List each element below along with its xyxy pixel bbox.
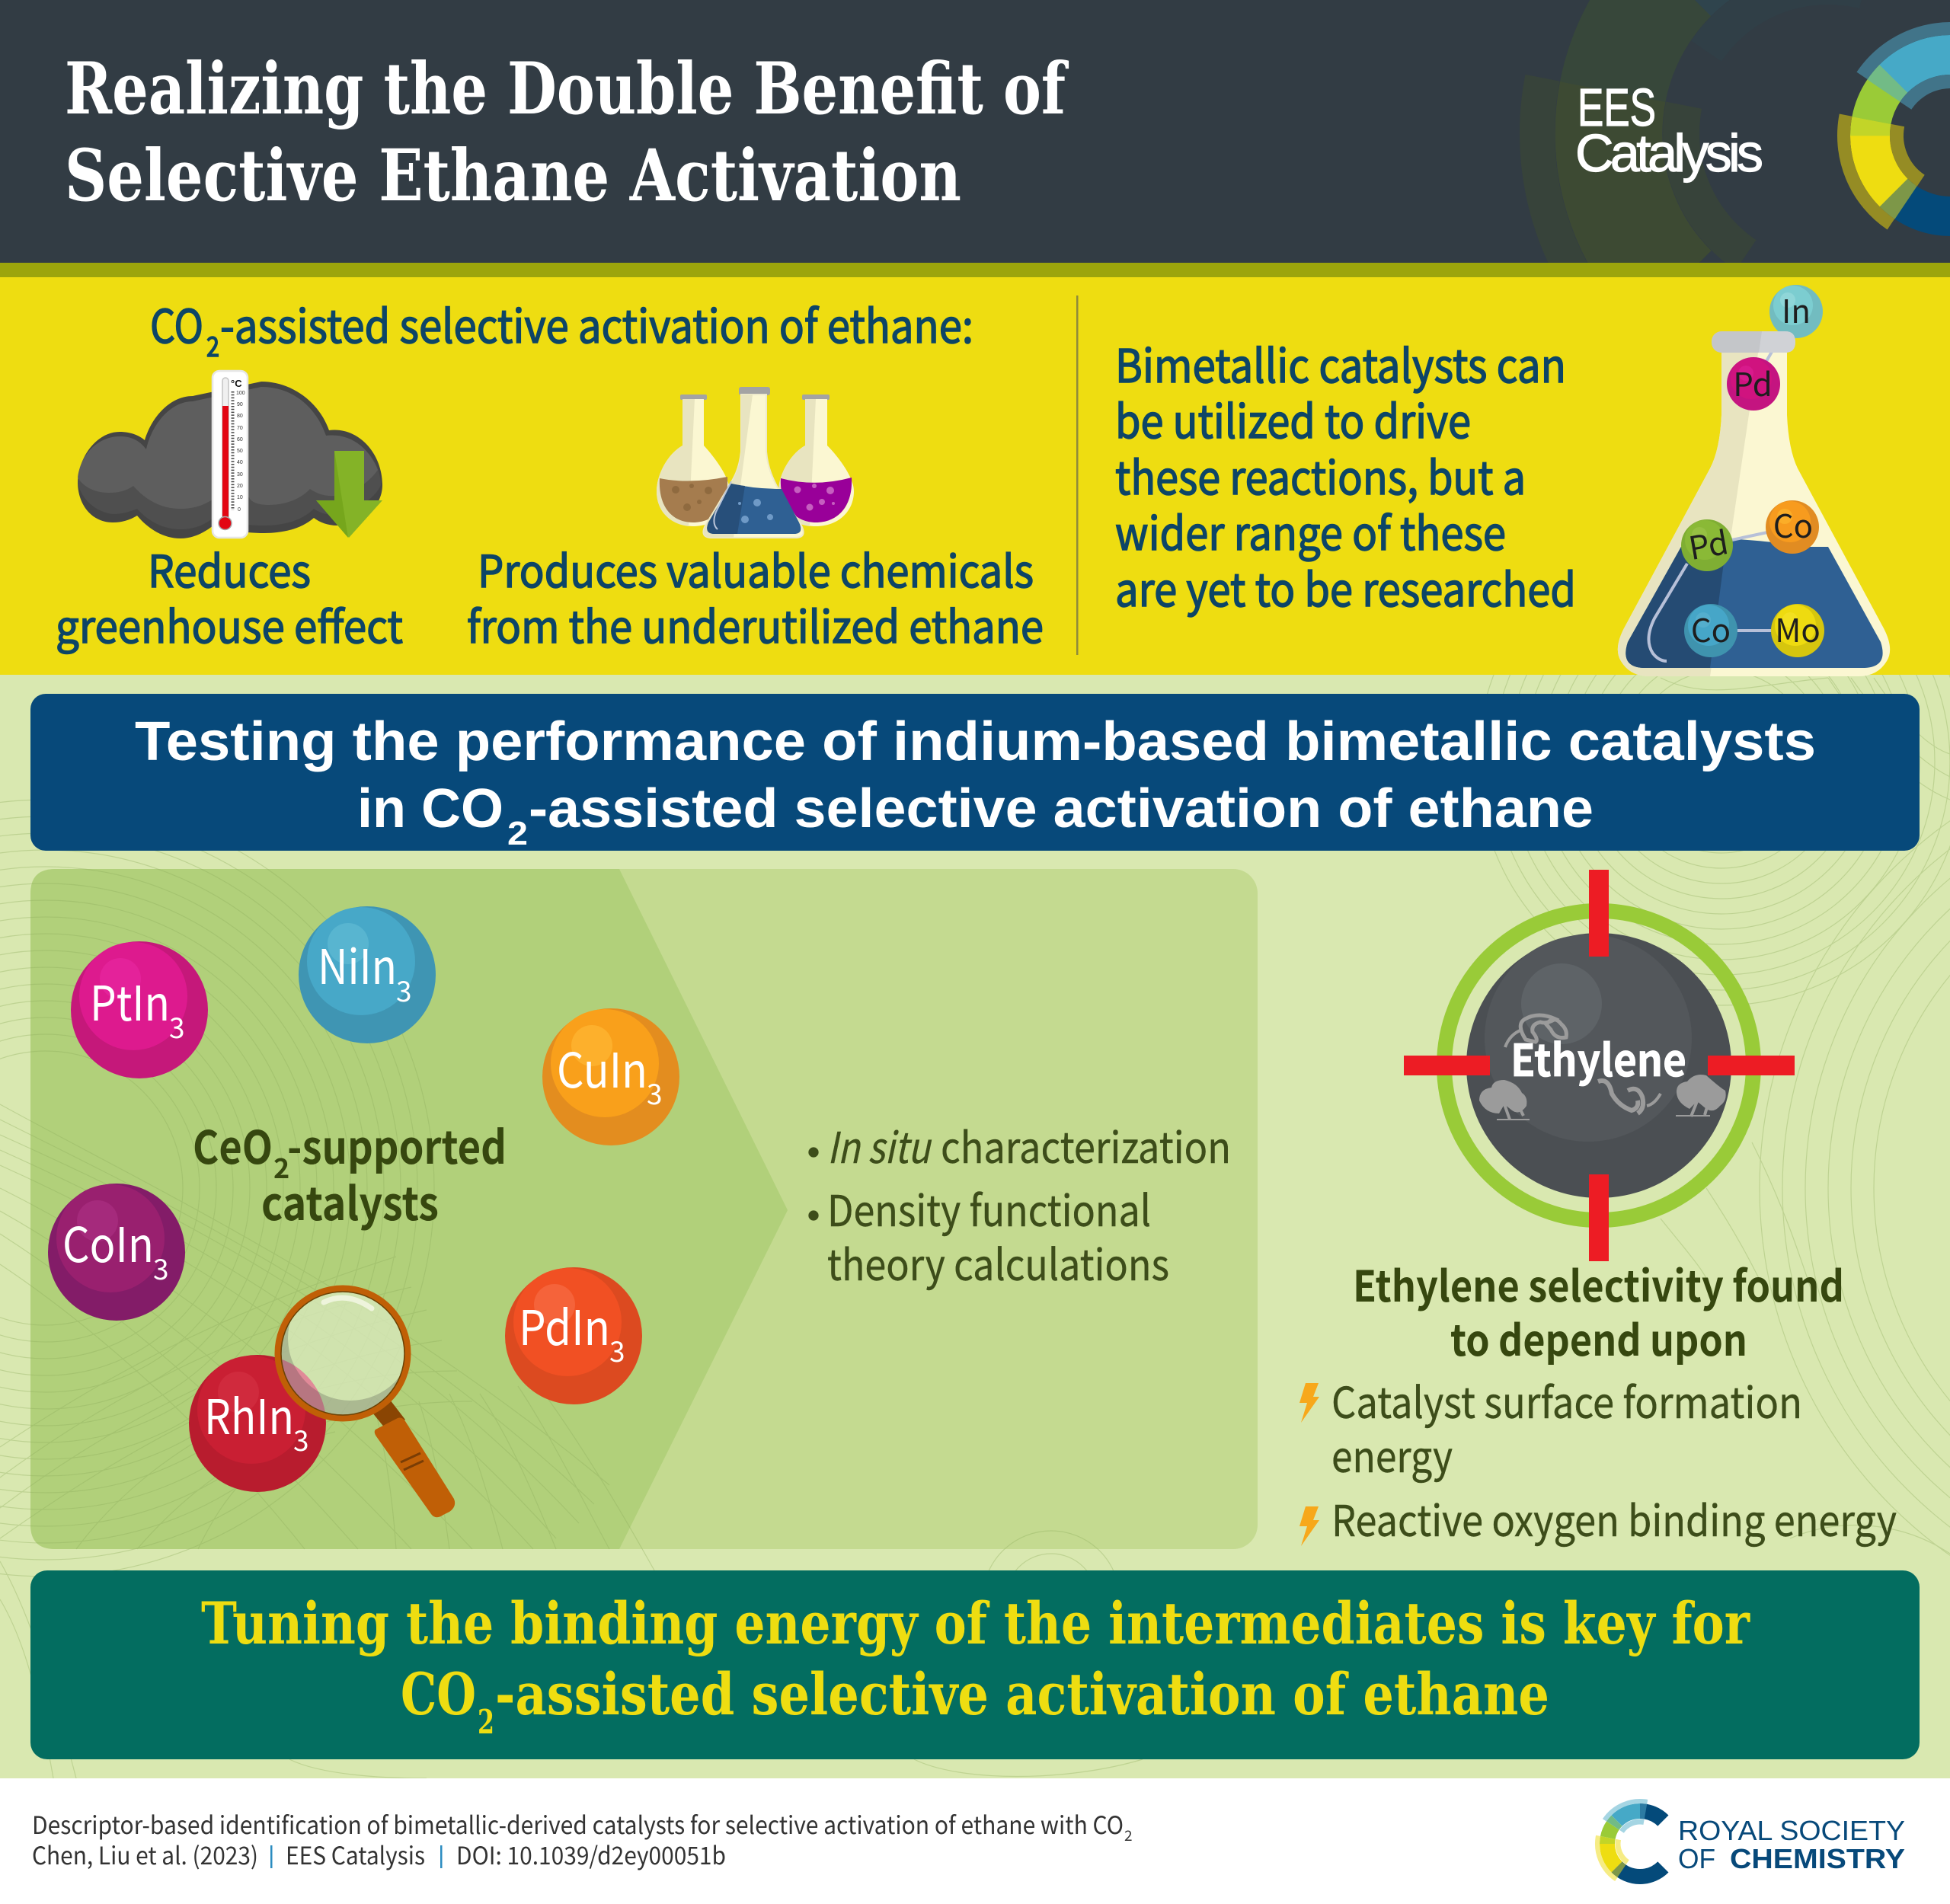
ghost logo in header	[1520, 0, 1756, 263]
journal name: EES Catalysis: EES	[1578, 78, 1656, 137]
bullet list: methods: theory calculations	[827, 1232, 1169, 1293]
icon: thermometer: 70	[237, 426, 243, 431]
smoke puffs	[1497, 1015, 1710, 1120]
citation: EES Catalysis	[286, 1837, 425, 1872]
banner: testing indium-based catalysts: in CO	[357, 778, 503, 839]
icon: thermometer: °C	[231, 378, 242, 389]
bullet list: methods: characterization	[941, 1114, 1231, 1176]
icon: bimetallic flask: Pd	[1685, 517, 1731, 570]
icon: thermometer: 100	[236, 391, 245, 396]
catalyst ball: CoIn3: 3	[153, 1247, 169, 1288]
label: CeO2-supported catalysts: 2	[273, 1147, 289, 1187]
label: reduces greenhouse effect	[56, 536, 403, 656]
catalyst ball: CuIn3: CuIn	[557, 1033, 647, 1102]
icon: thermometer: 10	[237, 495, 243, 500]
icon: thermometer: 60	[237, 437, 243, 442]
catalyst ball: CoIn3	[48, 1184, 185, 1321]
banner: conclusion: -assisted selective activation of ethane	[495, 1660, 1549, 1728]
bullet list: methods: Density functional	[827, 1177, 1151, 1239]
catalyst ball: NiIn3: 3	[396, 969, 412, 1010]
icon: thermometer: 50	[237, 449, 243, 454]
icon: thermometer	[213, 371, 248, 538]
text block: bimetallic catalysts: are yet to be researched	[1115, 554, 1576, 620]
text block: bimetallic catalysts: these reactions, but a	[1115, 442, 1526, 508]
icon: magnifying glass	[274, 1286, 456, 1517]
catalyst ball: CoIn3: CoIn	[62, 1207, 154, 1276]
icon: lightning bolt	[1299, 1506, 1319, 1546]
icon: bimetallic flask: Mo	[1775, 605, 1821, 652]
banner: conclusion: CO	[401, 1660, 476, 1728]
icon: thermometer: 90	[237, 402, 243, 407]
icon: bimetallic flask: In	[1782, 286, 1811, 333]
logo: journal ring	[1837, 22, 1950, 236]
label: reduces greenhouse effect: Reduces	[148, 536, 311, 600]
citation: Descriptor-based identification of bimetallic-derived catalysts for selective activation of ethane with CO	[32, 1807, 1124, 1842]
heading: ethylene selectivity: Ethylene selectivity found	[1353, 1253, 1844, 1315]
icon: thermometer: 0	[238, 507, 241, 513]
icon: lightning bolt	[1299, 1383, 1319, 1423]
catalyst ball: RhIn3: 3	[293, 1418, 309, 1459]
label: CeO2-supported catalysts: -supported	[287, 1111, 507, 1177]
citation: 2	[1124, 1825, 1133, 1845]
label: produces valuable chemicals: Produces valuable chemicals	[478, 536, 1034, 600]
journal name: EES Catalysis	[1575, 78, 1763, 183]
list: selectivity factors: Reactive oxygen binding energy	[1331, 1487, 1897, 1549]
catalyst ball: PdIn3: 3	[609, 1329, 625, 1370]
catalyst ball: CuIn3	[542, 1008, 679, 1145]
citation: Chen, Liu et al. (2023)	[32, 1837, 258, 1872]
page background	[0, 675, 1950, 1778]
icon: bimetallic flask	[1618, 285, 1890, 676]
citation: DOI: 10.1039/d2ey00051b	[456, 1837, 726, 1872]
catalyst ball: PtIn3: PtIn	[90, 966, 170, 1035]
heading: CO2-assisted selective activation: -assisted selective activation of ethane:	[220, 290, 973, 356]
catalyst ball: NiIn3: NiIn	[318, 929, 397, 998]
title: Selective Ethane Activation	[65, 134, 961, 218]
catalyst ball: CuIn3: 3	[647, 1072, 663, 1113]
title	[65, 47, 1069, 218]
catalyst ball: NiIn3	[299, 906, 436, 1043]
icon: down arrow	[316, 451, 382, 538]
journal name: EES Catalysis: Catalysis	[1575, 123, 1763, 183]
header background	[0, 0, 1950, 675]
text block: bimetallic catalysts: Bimetallic catalysts can	[1115, 330, 1566, 396]
banner: testing indium-based catalysts: Testing the performance of indium-based bimetallic catalysts	[135, 711, 1816, 772]
catalyst ball: PtIn3	[71, 941, 208, 1078]
panel: catalysts backing	[30, 869, 1258, 1549]
icon: thermometer: 30	[237, 472, 243, 478]
text block: bimetallic catalysts	[1115, 330, 1576, 620]
icon: three flasks	[657, 387, 854, 538]
title: Realizing the Double Benefit of	[65, 47, 1069, 131]
label: reduces greenhouse effect: greenhouse effect	[56, 592, 403, 656]
label: CeO2-supported catalysts: catalysts	[261, 1168, 439, 1234]
heading: CO2-assisted selective activation: CO	[150, 290, 203, 356]
list: selectivity factors: energy	[1331, 1423, 1453, 1485]
icon: thermometer: 20	[237, 484, 243, 489]
label: CeO2-supported catalysts	[193, 1111, 507, 1234]
catalyst ball: RhIn3	[189, 1355, 326, 1492]
catalyst ball: PtIn3: 3	[169, 1005, 185, 1046]
heading: ethylene selectivity	[1353, 1253, 1844, 1369]
footer	[0, 1778, 1950, 1904]
target: ethylene	[1404, 870, 1795, 1261]
banner: conclusion	[30, 1570, 1920, 1759]
bullet list: methods: In situ	[827, 1114, 932, 1176]
bullet list: methods	[809, 1114, 1231, 1293]
label: produces valuable chemicals: from the underutilized ethane	[467, 592, 1044, 656]
banner: conclusion: 2	[478, 1703, 494, 1742]
icon: bimetallic flask: Pd	[1733, 359, 1773, 406]
banner: testing indium-based catalysts	[30, 694, 1920, 852]
logo: Royal Society of Chemistry	[1581, 1784, 1905, 1903]
target: ethylene: Ethylene	[1510, 1025, 1686, 1089]
banner: testing indium-based catalysts: 2	[507, 815, 528, 852]
logo: Royal Society of Chemistry: CHEMISTRY	[1730, 1843, 1905, 1874]
list: selectivity factors	[1331, 1369, 1897, 1549]
text block: bimetallic catalysts: wider range of these	[1115, 497, 1506, 564]
catalyst ball: RhIn3: RhIn	[204, 1379, 294, 1449]
banner: testing indium-based catalysts: -assisted selective activation of ethane	[529, 778, 1594, 839]
icon: cloud with thermometer and down arrow	[78, 371, 382, 538]
text block: bimetallic catalysts: be utilized to drive	[1115, 385, 1471, 452]
icon: thermometer: 40	[237, 460, 243, 465]
logo: Royal Society of Chemistry: OF	[1678, 1843, 1715, 1874]
heading: ethylene selectivity: to depend upon	[1450, 1307, 1747, 1369]
heading: CO2-assisted selective activation: 2	[206, 325, 219, 365]
list: selectivity factors: Catalyst surface formation	[1331, 1369, 1802, 1431]
icon: bimetallic flask: Co	[1691, 605, 1731, 652]
crosshair	[1404, 870, 1795, 1261]
logo: Royal Society of Chemistry: ROYAL SOCIETY	[1678, 1815, 1905, 1846]
label: CeO2-supported catalysts: CeO	[193, 1111, 273, 1177]
icon: thermometer: 80	[237, 414, 243, 419]
catalyst ball: PdIn3	[505, 1267, 642, 1404]
citation	[32, 1807, 1133, 1872]
label: produces valuable chemicals	[467, 536, 1044, 656]
icon: bimetallic flask: Co	[1773, 501, 1813, 548]
catalyst ball: PdIn3: PdIn	[519, 1290, 610, 1359]
